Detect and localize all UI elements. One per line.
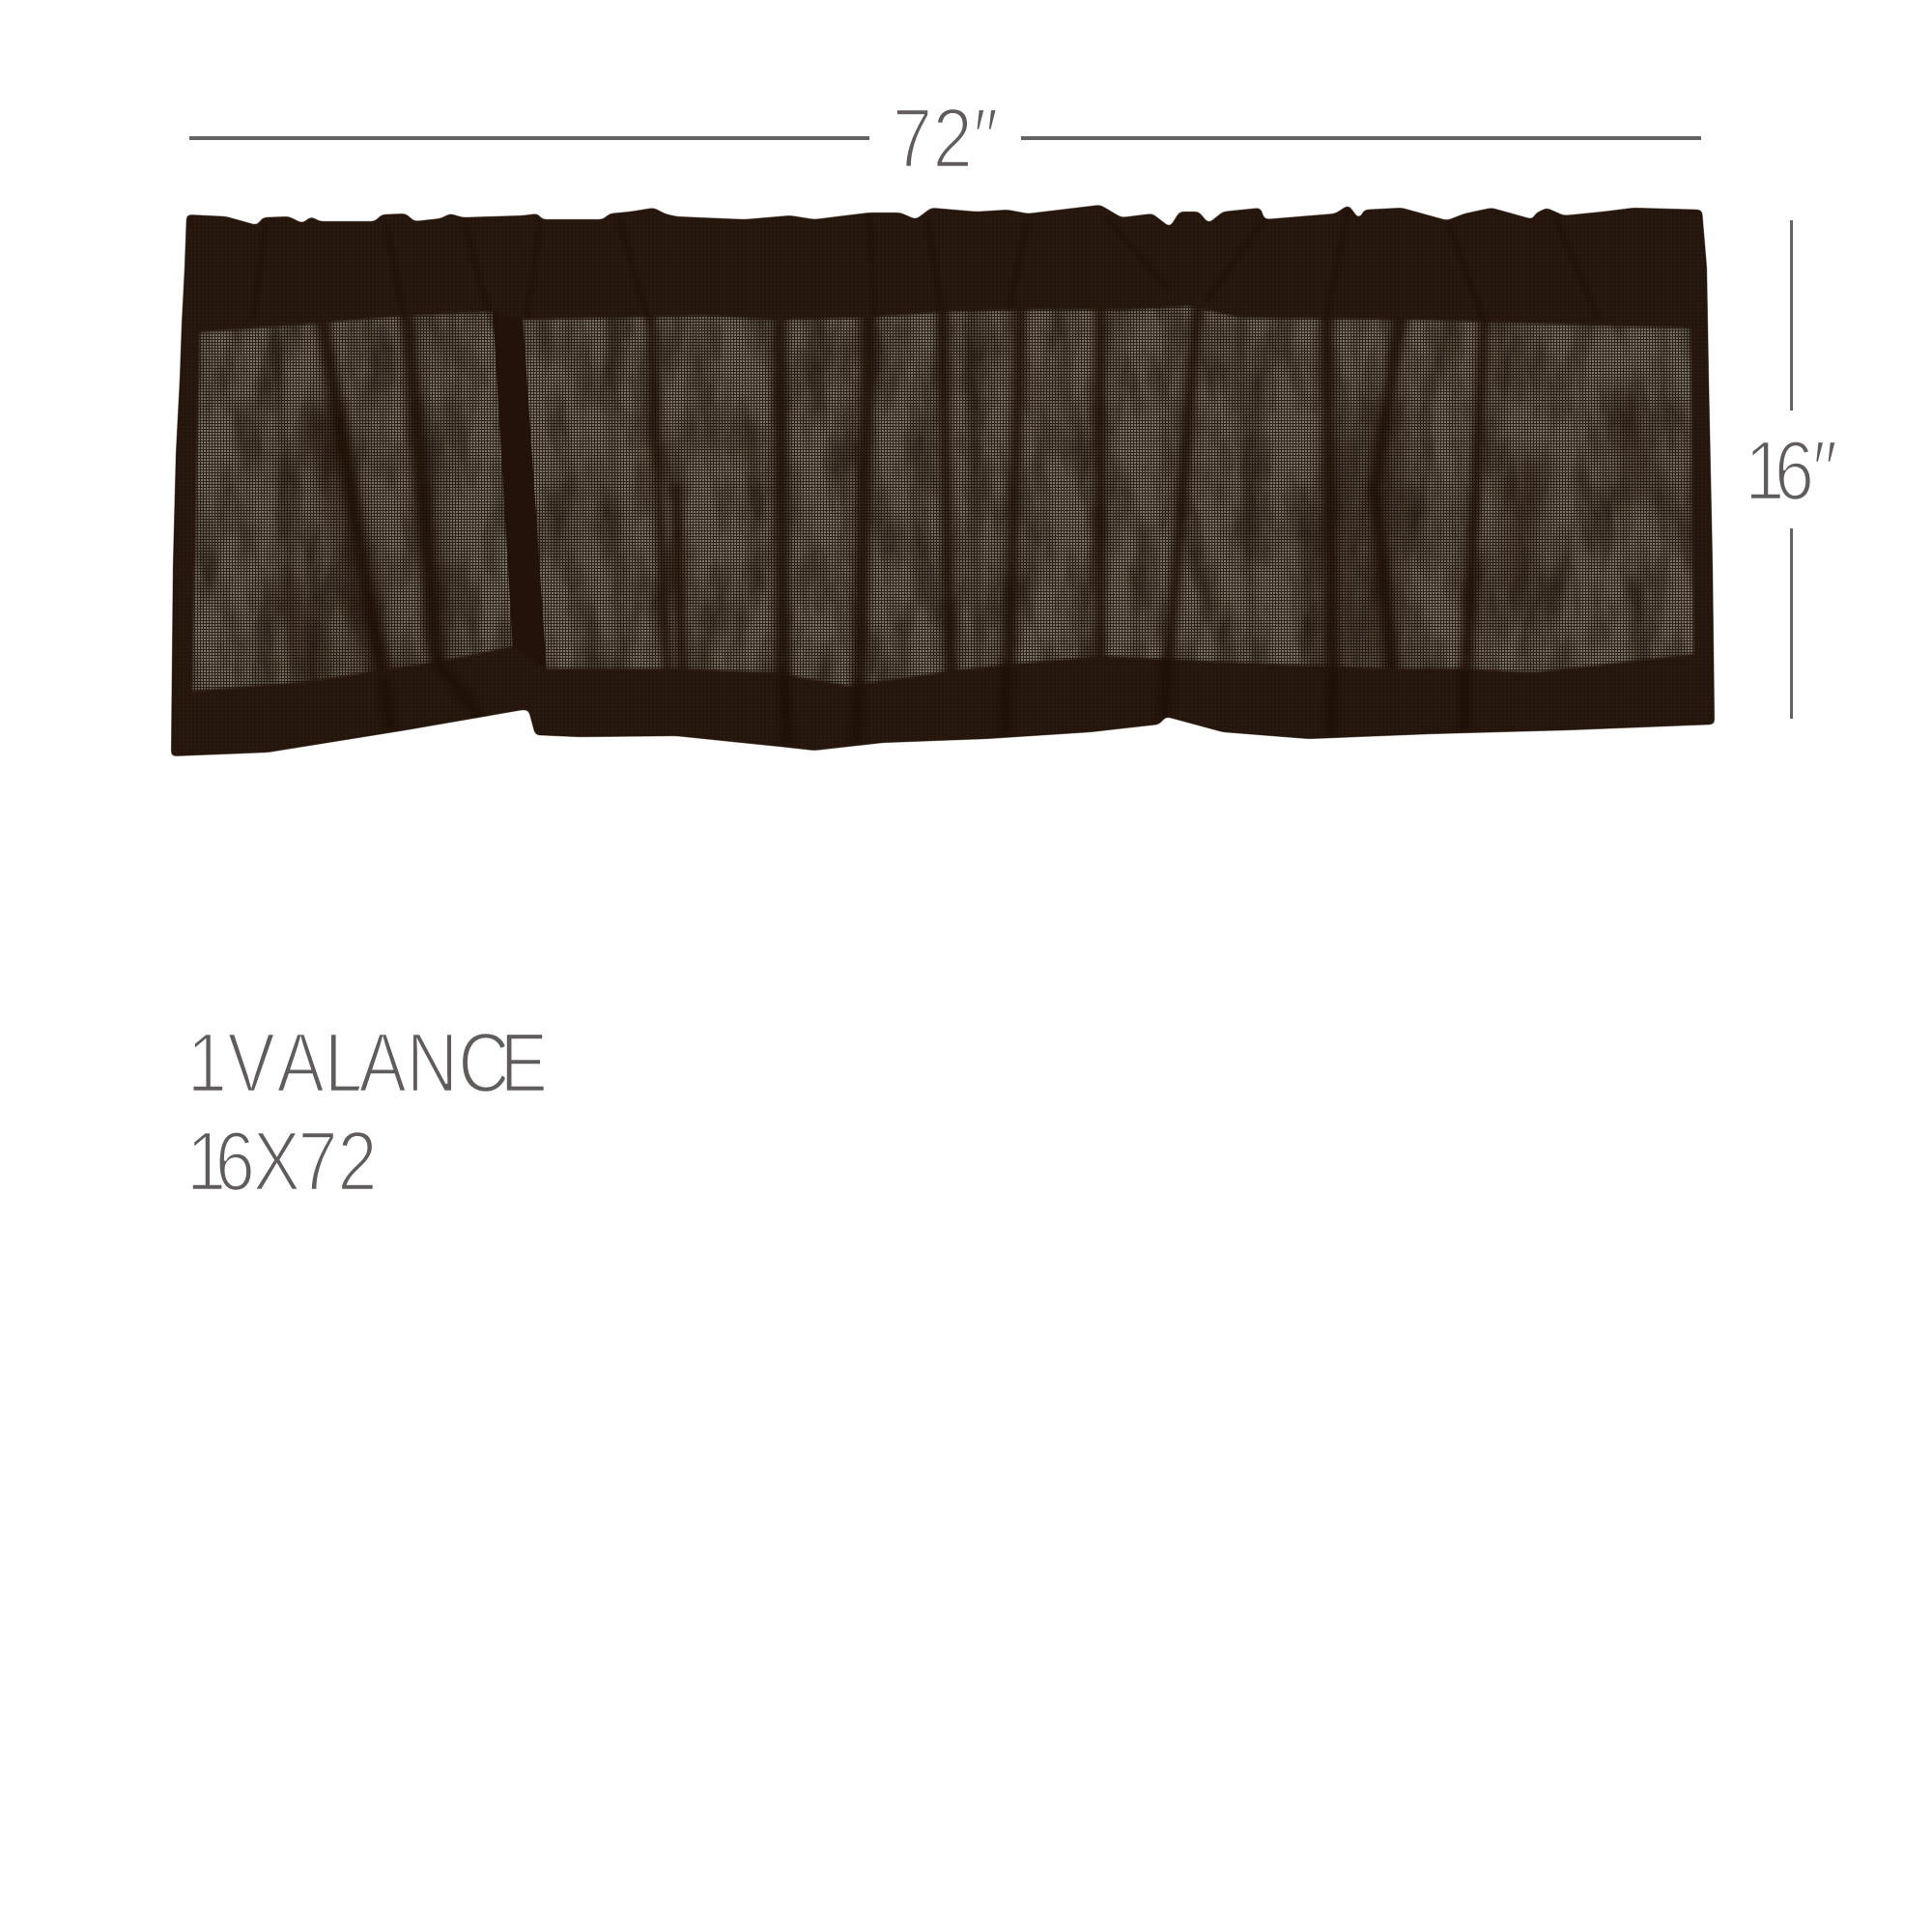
broad shaded drapes xyxy=(290,386,1642,696)
hem folds xyxy=(383,657,1464,744)
product label: 1 VALANCE xyxy=(187,1016,548,1110)
product label: 16X72 xyxy=(186,1115,377,1208)
deep fold shadows xyxy=(275,299,1485,696)
product label xyxy=(186,1016,548,1208)
open-weave centre panel xyxy=(184,299,1710,696)
dimension: height 16 inches xyxy=(1745,220,1837,719)
dimension: width 72 inches xyxy=(189,92,1701,185)
fabric base xyxy=(164,198,1729,763)
gathered heading folds xyxy=(485,311,649,330)
infographic canvas xyxy=(170,109,1835,1190)
dimension: width 72 inches: 72″ xyxy=(893,92,998,185)
overlapping flap fold xyxy=(493,307,547,673)
dimension: height 16 inches: 16″ xyxy=(1745,424,1837,518)
curtain valance xyxy=(164,198,1729,763)
